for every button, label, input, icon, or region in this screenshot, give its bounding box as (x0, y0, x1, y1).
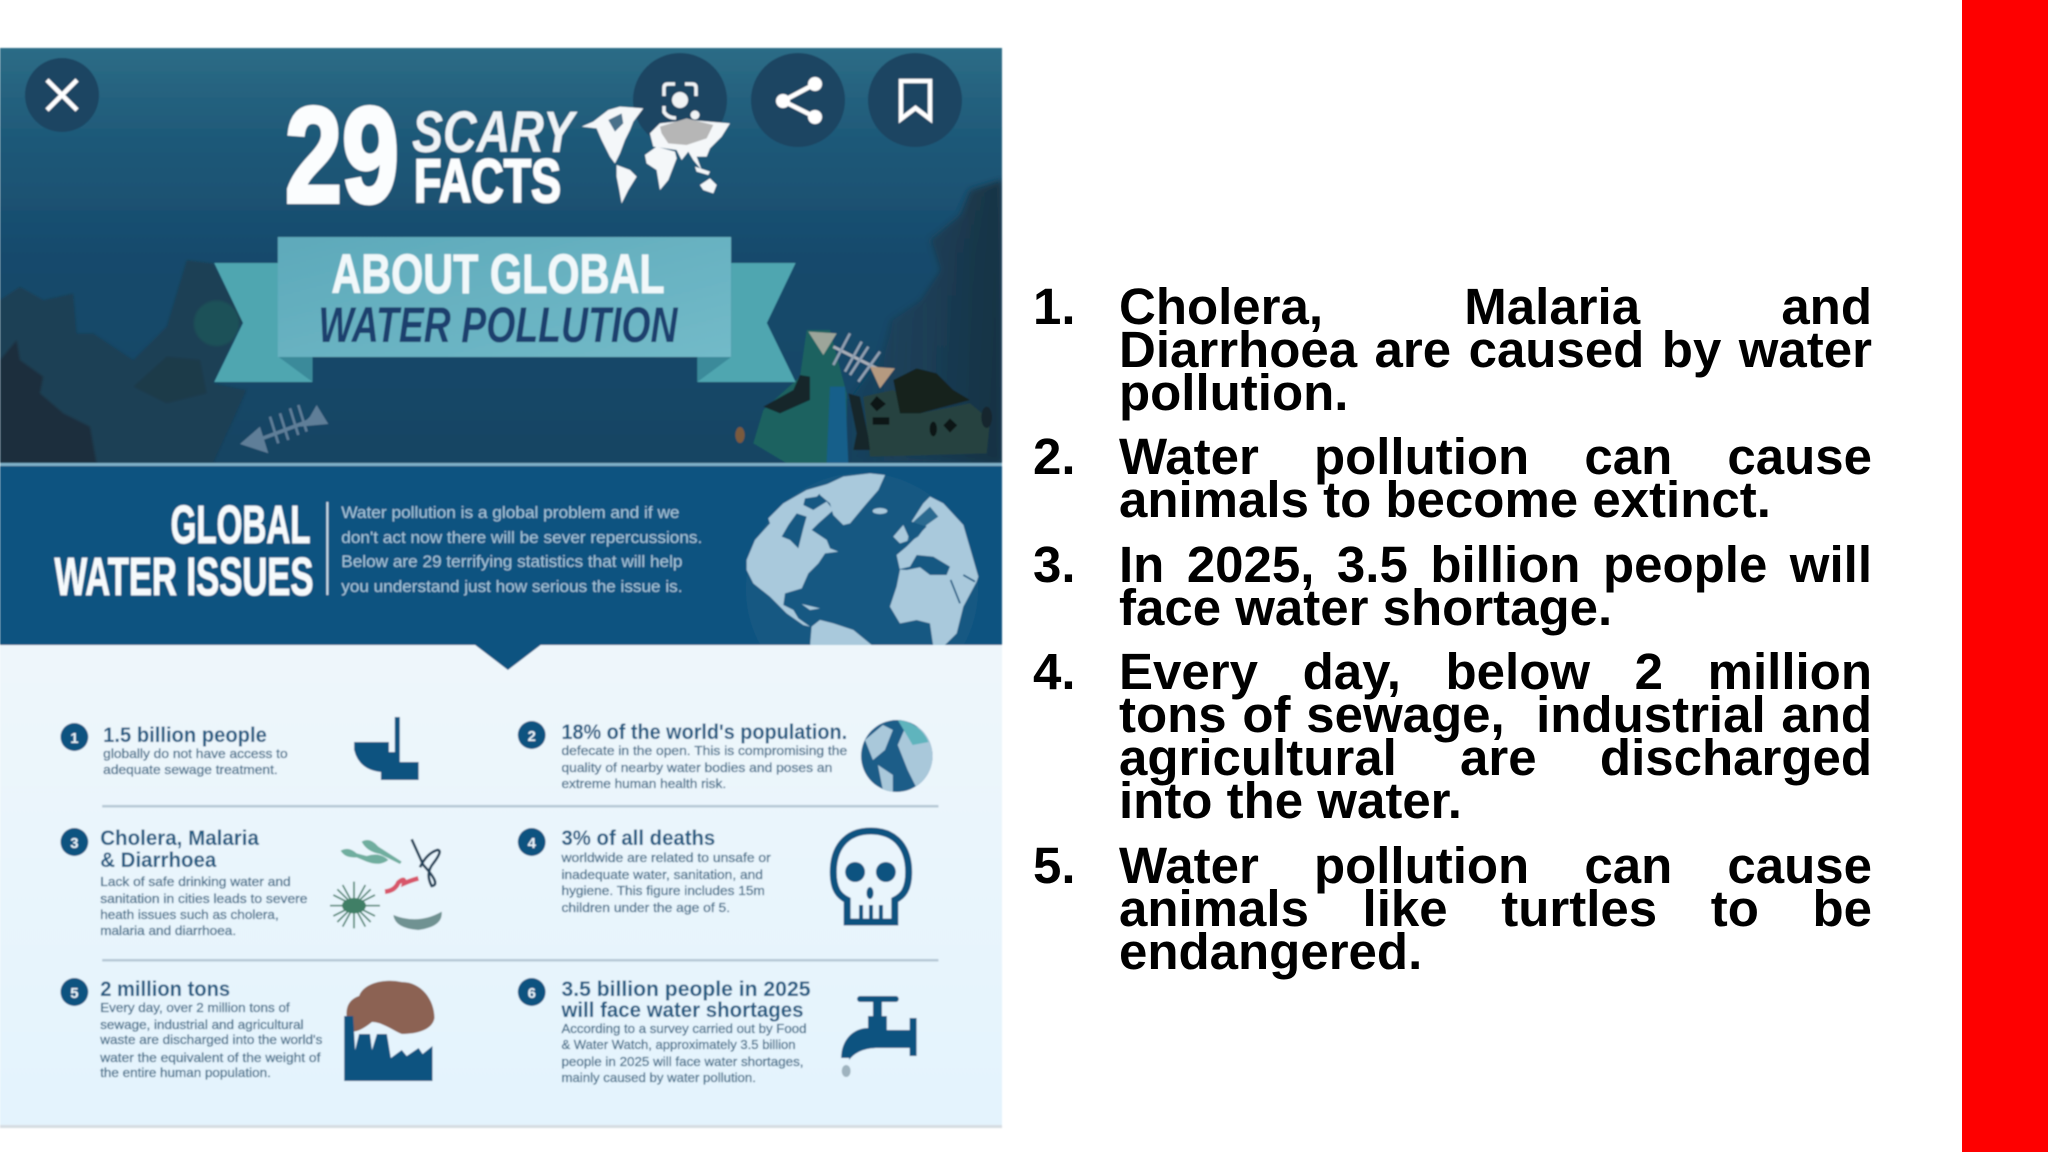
stat 6: 3.5 billion people in 2025: will face water shortages (560, 999, 804, 1022)
list item 2: 2. (1033, 428, 1076, 485)
intro paragraph: you understand just how serious the issue is. (341, 577, 682, 596)
list item 2: Water pollution can cause (1119, 428, 1872, 485)
list item 2: animals to become extinct. (1119, 471, 1771, 528)
stat 1: 1.5 billion people (61, 723, 288, 777)
icon: share button (751, 53, 845, 147)
icon: germs (330, 839, 442, 930)
stat 6: 3.5 billion people in 2025: people in 2025 will face water shortages, (561, 1054, 804, 1069)
stat 4: 3% of all deaths: children under the age of 5. (561, 900, 730, 915)
icon: skull (833, 831, 909, 922)
stat 2: 18% of population: 18% of the world's population. (561, 721, 847, 744)
header background (0, 48, 1002, 463)
stat 5: 2 million tons: the entire human population. (100, 1065, 271, 1080)
stat 1: 1.5 billion people: 1.5 billion people (103, 724, 267, 747)
stat 6: 3.5 billion people in 2025: mainly caused by water pollution. (561, 1070, 756, 1085)
ribbon banner (214, 237, 796, 382)
banner heading: about global: ABOUT GLOBAL (331, 243, 665, 305)
heading: global: GLOBAL (171, 495, 310, 555)
list item 4: tons of sewage, industrial and (1119, 686, 1872, 743)
heading: water issues: WATER ISSUES (55, 547, 313, 607)
stat 6: 3.5 billion people in 2025: According to a survey carried out by Food (561, 1021, 806, 1036)
stat 1: 1.5 billion people: 1 (70, 730, 79, 747)
icon: trash pile (735, 330, 992, 463)
list item 2 (1033, 428, 1872, 528)
title: scary: SCARY (412, 100, 578, 165)
stat 3: cholera malaria diarrhoea: heath issues such as cholera, (100, 907, 279, 922)
list item 1: pollution. (1119, 364, 1348, 421)
stat 4: 3% of all deaths: inadequate water, sanitation, and (561, 867, 763, 882)
stat 3: cholera malaria diarrhoea: sanitation in cities leads to severe (100, 891, 308, 906)
list item 5: Water pollution can cause (1119, 837, 1872, 894)
intro paragraph: Below are 29 terrifying statistics that will help (341, 552, 682, 571)
stat 3: cholera malaria diarrhoea: malaria and diarrhoea. (100, 923, 236, 938)
title: facts: FACTS (414, 147, 561, 215)
list item 3: 3. (1033, 536, 1076, 593)
stat 4: 3% of all deaths: worldwide are related to unsafe or (560, 850, 772, 865)
icon: small globe (861, 720, 932, 795)
icon: lens button (633, 53, 727, 147)
stat 3: cholera malaria diarrhoea: Lack of safe drinking water and (100, 874, 291, 889)
stat 1: 1.5 billion people: globally do not have access to (103, 746, 288, 761)
stat 6: 3.5 billion people in 2025: & Water Watch, approximately 3.5 billion (561, 1037, 796, 1052)
stat 2: 18% of population: 2 (528, 728, 536, 745)
stat 1: 1.5 billion people: adequate sewage treatment. (103, 762, 278, 777)
stat 6: 3.5 billion people in 2025 (518, 978, 811, 1085)
icon: world map (582, 107, 730, 203)
stat 2: 18% of population: extreme human health risk. (561, 776, 726, 791)
stat 3: cholera malaria diarrhoea: 3 (70, 835, 79, 852)
stat 4: 3% of all deaths: 3% of all deaths (561, 827, 715, 850)
banner heading: water pollution: WATER POLLUTION (318, 297, 678, 353)
icon: bookmark button (868, 53, 962, 147)
list item 1: Cholera, Malaria and (1119, 278, 1872, 335)
stat 5: 2 million tons: 5 (70, 985, 79, 1002)
list item 1: 1. (1033, 278, 1076, 335)
list item 1: Diarrhoea are caused by water (1119, 321, 1872, 378)
icon: dripping tap (841, 996, 917, 1077)
list item 3: face water shortage. (1119, 579, 1612, 636)
stat 5: 2 million tons: water the equivalent of the weight of (99, 1050, 321, 1065)
intro paragraph: don't act now there will be sever repercussions. (341, 528, 702, 547)
stat 2: 18% of population: quality of nearby water bodies and poses an (561, 760, 832, 775)
intro paragraph (341, 503, 702, 596)
list item 4: into the water. (1119, 772, 1462, 829)
stat 3: cholera malaria diarrhoea (61, 827, 308, 938)
icon: left fish skeleton (240, 405, 328, 453)
stat 6: 3.5 billion people in 2025: 3.5 billion people in 2025 (561, 978, 811, 1001)
stat 3: cholera malaria diarrhoea: Cholera, Malaria (100, 827, 259, 850)
list item 4 (1033, 643, 1872, 829)
stat 4: 3% of all deaths (518, 827, 772, 915)
list item 1 (1033, 278, 1872, 421)
stat 2: 18% of population: defecate in the open. This is compromising the (561, 743, 847, 758)
icon: toilet (354, 717, 419, 780)
list item 4: agricultural are discharged (1119, 729, 1872, 786)
icon: polluting factory (344, 981, 434, 1081)
panel: statistics (0, 645, 1002, 1128)
stat 5: 2 million tons: 2 million tons (100, 978, 230, 1001)
list item 5: 5. (1033, 837, 1076, 894)
list item 3: In 2025, 3.5 billion people will (1119, 536, 1872, 593)
stat 3: cholera malaria diarrhoea: & Diarrhoea (100, 849, 217, 872)
stat 5: 2 million tons (61, 978, 322, 1080)
icon: large globe (745, 472, 980, 646)
stat 5: 2 million tons: waste are discharged into the world's (99, 1032, 322, 1047)
seaweed and debris silhouettes (0, 180, 1002, 463)
list item 4: Every day, below 2 million (1119, 643, 1872, 700)
list item 3 (1033, 536, 1872, 636)
panel: global water issues band (0, 462, 1004, 646)
stat 6: 3.5 billion people in 2025: 6 (528, 985, 536, 1002)
stat 4: 3% of all deaths: 4 (528, 835, 537, 852)
red side bar (1962, 0, 2048, 1152)
stat 5: 2 million tons: sewage, industrial and agricultural (100, 1017, 304, 1032)
stat 4: 3% of all deaths: hygiene. This figure includes 15m (561, 883, 765, 898)
stat 2: 18% of population (518, 721, 847, 791)
infographic image panel (0, 46, 1004, 1128)
list item 5: endangered. (1119, 923, 1422, 980)
list item 4: 4. (1033, 643, 1076, 700)
icon: close button (25, 58, 99, 132)
intro paragraph: Water pollution is a global problem and if we (341, 503, 680, 522)
stat 5: 2 million tons: Every day, over 2 million tons of (100, 1000, 290, 1015)
title: 29: 29 (285, 79, 399, 231)
list item 5 (1033, 837, 1872, 980)
icon: right fish skeleton (808, 332, 895, 388)
list item 5: animals like turtles to be (1119, 880, 1872, 937)
